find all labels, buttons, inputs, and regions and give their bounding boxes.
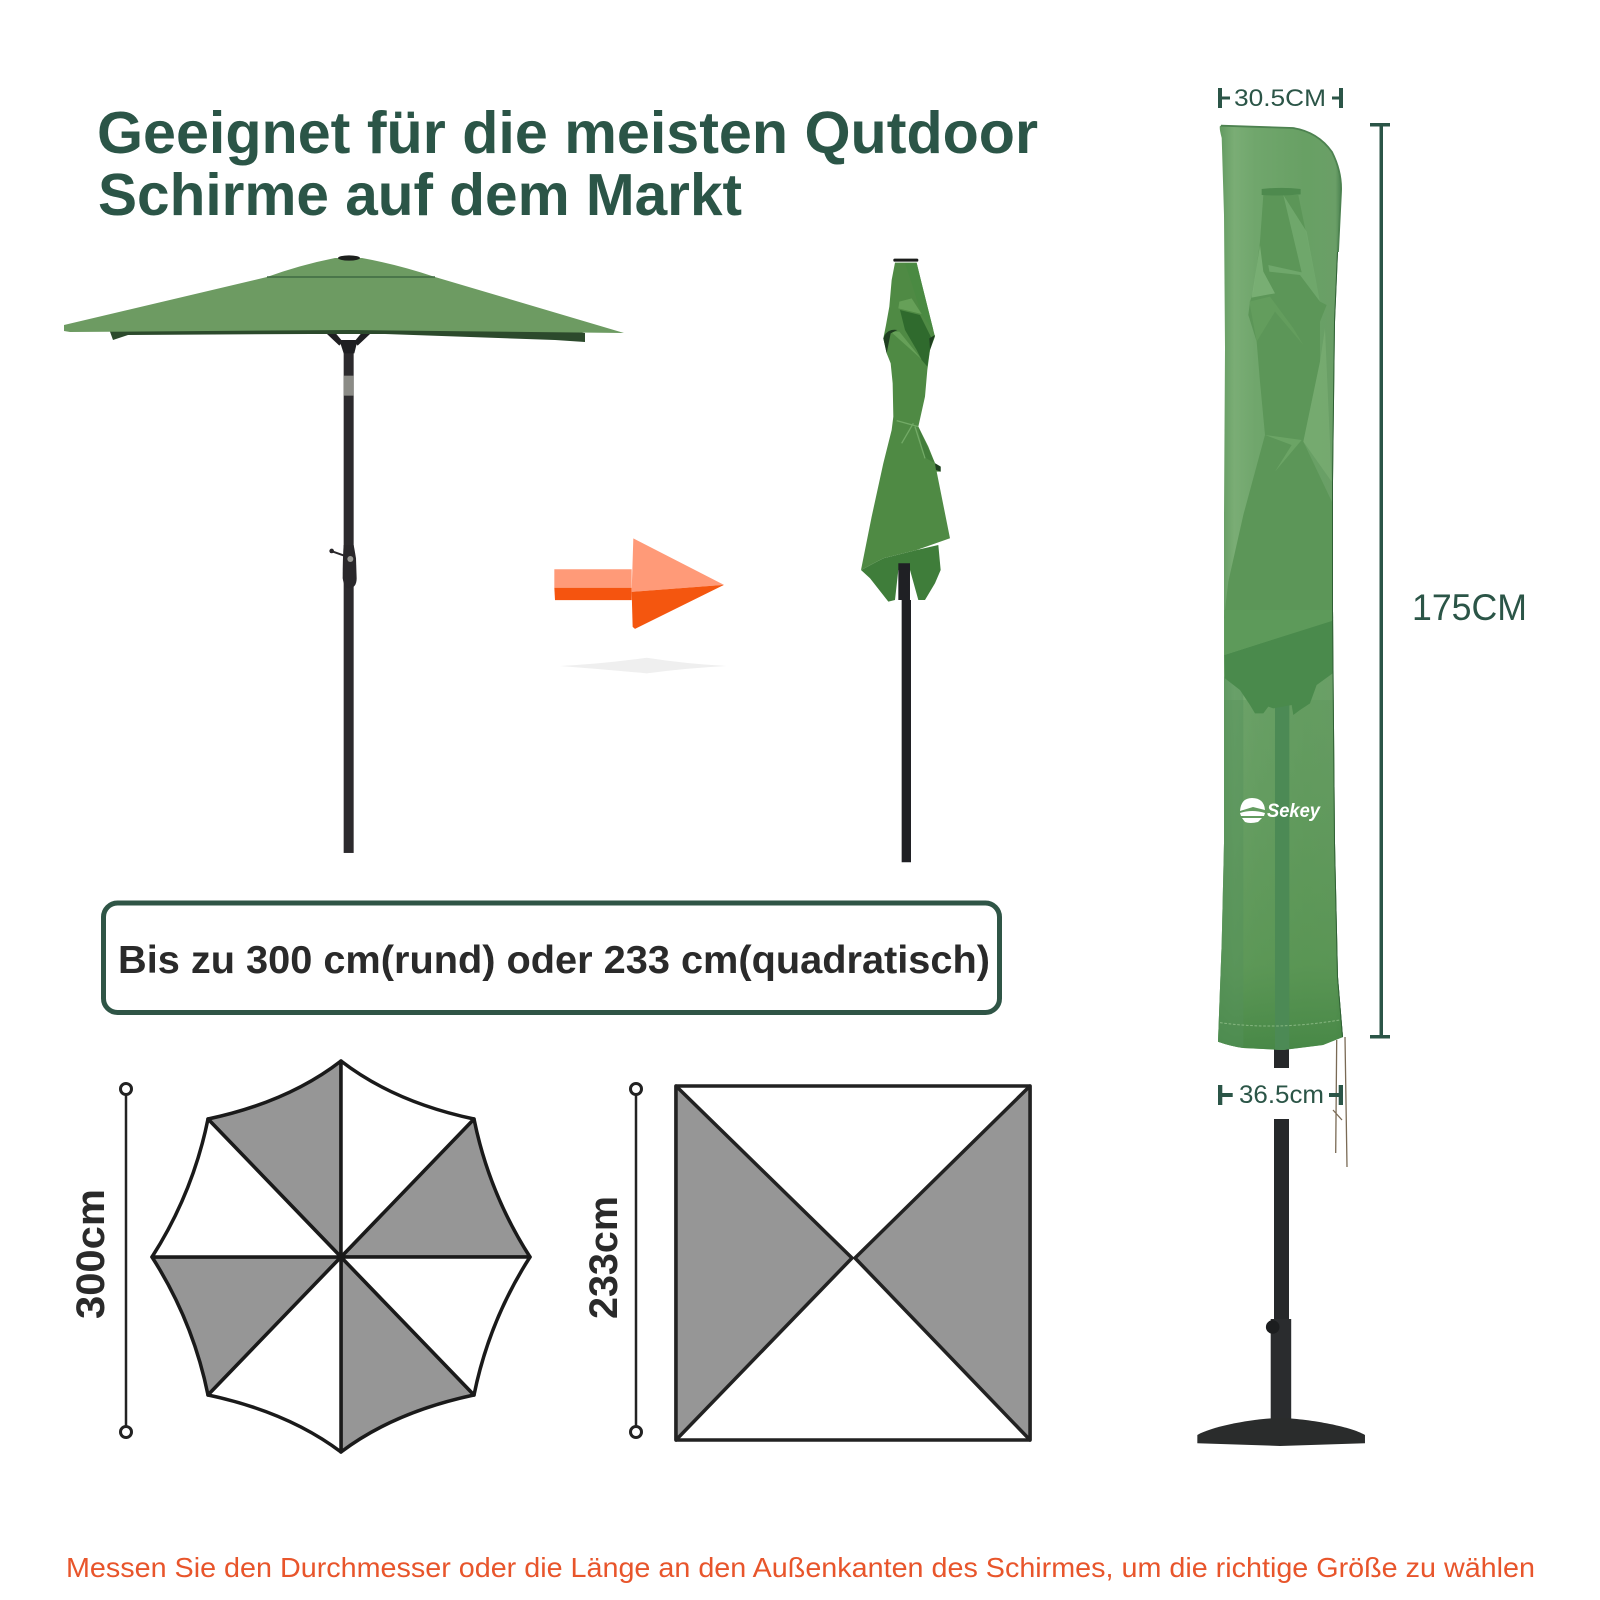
stand pole lower bbox=[1274, 1119, 1289, 1324]
fold shadows bbox=[900, 310, 932, 367]
canopy vent line bbox=[267, 276, 435, 278]
bottom width dimension: 36.5cm bbox=[1218, 1081, 1343, 1109]
tie bbox=[897, 421, 925, 458]
top width dimension: 30.5CM: 30.5CM bbox=[1234, 85, 1326, 112]
knob bbox=[1266, 1320, 1279, 1334]
top cap bbox=[893, 259, 918, 262]
lower cover shading bbox=[1217, 700, 1350, 1053]
square dimension: 233cm bbox=[582, 1084, 642, 1438]
umbrella pole bbox=[321, 328, 376, 853]
umbrella base stand bbox=[1197, 1040, 1365, 1446]
umbrella silhouette through cover bbox=[1224, 188, 1335, 618]
umbrella hem through cover bbox=[1224, 620, 1333, 715]
title: Geeignet für die meisten Qutdoor bbox=[97, 100, 1038, 166]
drawstring bbox=[1333, 1037, 1347, 1167]
stand pole upper bbox=[1274, 1040, 1289, 1068]
round dimension: 300cm bbox=[69, 1084, 132, 1438]
folded pole bbox=[898, 563, 911, 862]
gray triangles bbox=[676, 1086, 852, 1440]
canopy top cap bbox=[338, 255, 360, 261]
collar bbox=[1271, 1319, 1291, 1423]
square dimension: 233cm: 233cm bbox=[582, 1196, 626, 1319]
lower folds bbox=[861, 545, 941, 602]
box text: Bis zu 300 cm(rund) oder 233 cm(quadratisch) bbox=[118, 939, 990, 982]
logo: Sekey: Sekey bbox=[1267, 801, 1321, 822]
open umbrella bbox=[64, 255, 624, 853]
base bbox=[1197, 1418, 1365, 1446]
top width dimension: 30.5CM bbox=[1218, 85, 1343, 112]
height dimension: 175CM bbox=[1370, 123, 1527, 1038]
size box bbox=[104, 903, 1000, 1012]
folded canopy bbox=[861, 263, 950, 570]
pole through cover bbox=[1275, 703, 1289, 1050]
gray panels bbox=[208, 1061, 341, 1257]
round dimension: 300cm: 300cm bbox=[69, 1189, 113, 1319]
cover bbox=[1217, 120, 1350, 1167]
footer note: Messen Sie den Durchmesser oder die Länge an den Außenkanten des Schirmes, um die richtige Größe zu wählen bbox=[66, 1552, 1535, 1583]
cover right edge bbox=[1333, 252, 1343, 1037]
square umbrella diagram bbox=[676, 1086, 1030, 1440]
hem stitching bbox=[1220, 1020, 1340, 1026]
canopy bbox=[64, 258, 624, 333]
bottom width dimension: 36.5cm: 36.5cm bbox=[1239, 1081, 1324, 1109]
title bbox=[97, 100, 1038, 228]
arrow bbox=[554, 538, 727, 673]
title: Schirme auf dem Markt bbox=[98, 162, 742, 228]
round umbrella diagram bbox=[152, 1061, 530, 1452]
cover left band bbox=[1217, 677, 1243, 1050]
canopy underside bbox=[109, 329, 585, 342]
folded umbrella bbox=[861, 259, 950, 862]
white panels bbox=[341, 1061, 474, 1257]
cover top edge bbox=[1221, 126, 1341, 252]
height dimension: 175CM: 175CM bbox=[1412, 587, 1527, 628]
logo: Sekey bbox=[1240, 798, 1321, 823]
